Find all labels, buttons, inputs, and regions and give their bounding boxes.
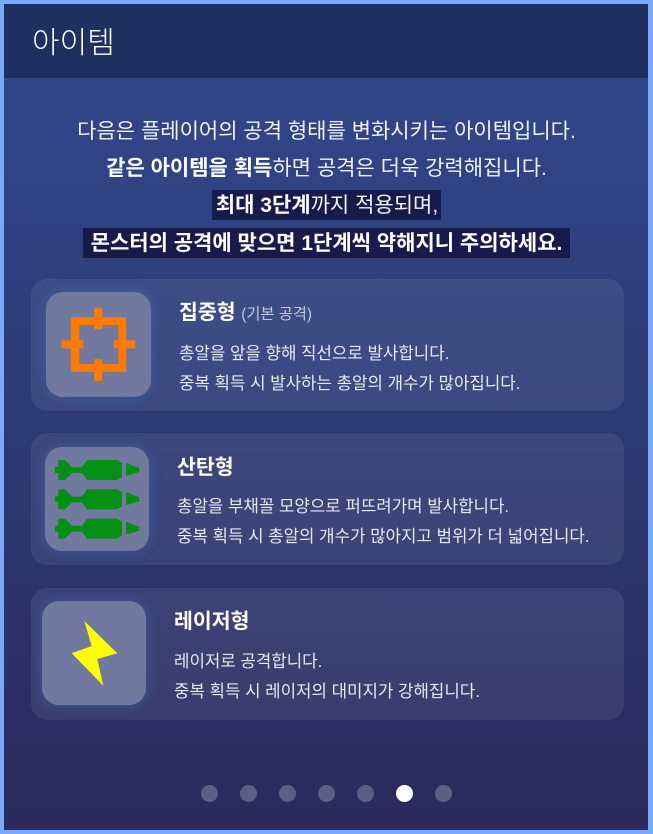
text: 다음은 플레이어의 공격 형태를 변화시키는 아이템입니다.: [77, 120, 576, 143]
icon: green bullets: [45, 447, 149, 551]
title: 아이템: [32, 27, 115, 60]
text: focus type description: [179, 344, 520, 393]
icon: yellow lightning: [42, 601, 146, 705]
panel: spread type: [31, 433, 624, 565]
text: spread type description: 총알을 부채꼴 모양으로 퍼뜨려가며 발사합니다.: [177, 497, 509, 516]
panel: laser type: [31, 588, 624, 720]
text: laser type description: [174, 652, 480, 701]
text: spread type description: [177, 497, 590, 546]
pagination dots: [201, 785, 452, 802]
heading: spread type: 산탄형: [177, 456, 234, 479]
heading: laser type: 레이저형: [174, 610, 249, 633]
text: laser type description: 중복 획득 시 레이저의 대미지가 강해집니다.: [174, 682, 480, 701]
icon: orange crosshair: [46, 292, 151, 397]
text: laser type description: 레이저로 공격합니다.: [174, 652, 322, 671]
panel: focus type: [31, 279, 624, 411]
text: focus type description: 총알을 앞을 향해 직선으로 발사합니다.: [179, 344, 449, 363]
heading: focus type: 집중형 (기본 공격): [179, 301, 312, 324]
intro text: [77, 120, 576, 258]
text: 최대 3단계까지 적용되며,: [216, 194, 438, 217]
header bar: [4, 4, 648, 78]
text: 몬스터의 공격에 맞으면 1단계씩 약해지니 주의하세요.: [91, 232, 562, 255]
text: focus type description: 중복 획득 시 발사하는 총알의 개수가 많아집니다.: [179, 374, 520, 393]
text: 같은 아이템을 획득하면 공격은 더욱 강력해집니다.: [106, 157, 547, 180]
text: spread type description: 중복 획득 시 총알의 개수가 많아지고 범위가 더 넓어집니다.: [177, 527, 590, 546]
